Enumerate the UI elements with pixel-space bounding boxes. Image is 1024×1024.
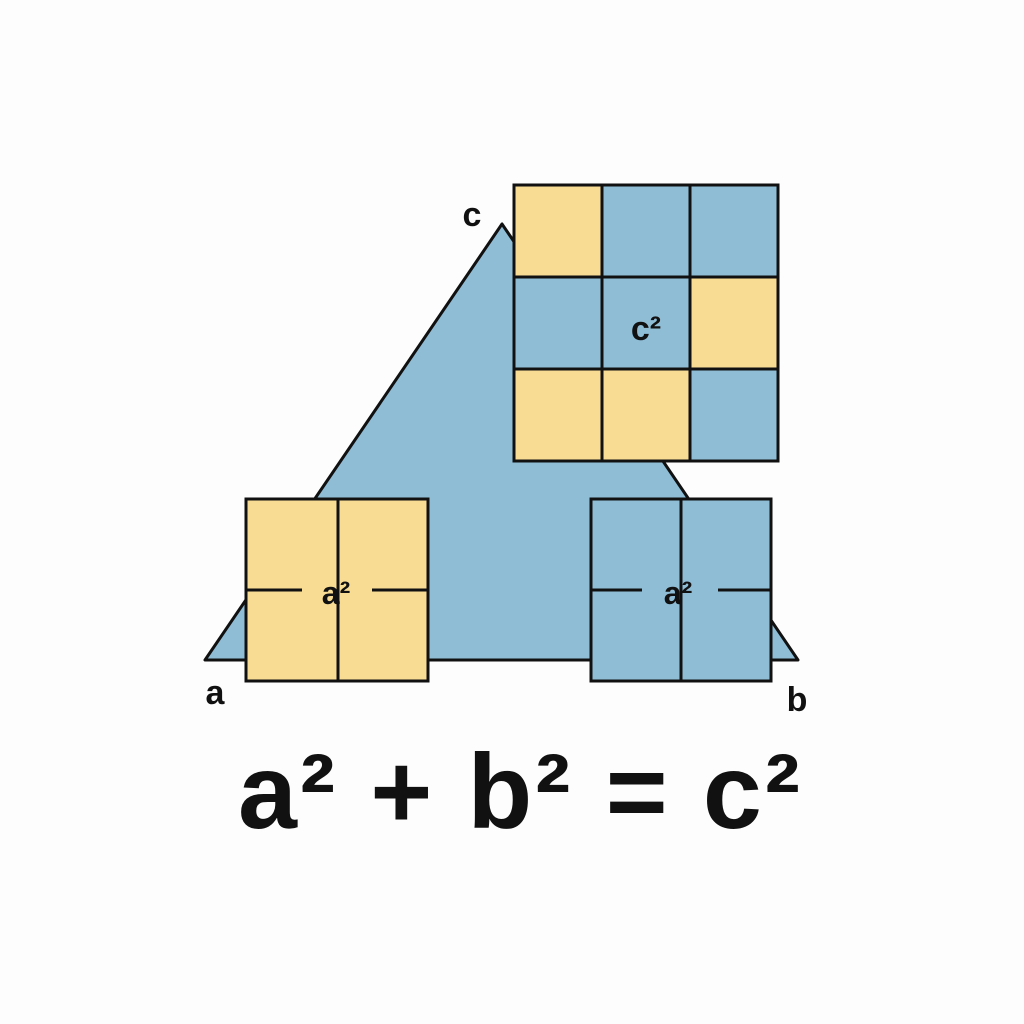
label b: b bbox=[787, 681, 807, 719]
equation: a² + b² = c² bbox=[238, 733, 800, 851]
triangle bbox=[205, 224, 798, 660]
square: c squared grid: c² bbox=[631, 310, 661, 348]
label c: c bbox=[463, 196, 481, 234]
square: a squared (yellow): a² bbox=[322, 575, 350, 611]
label a: a bbox=[206, 674, 226, 712]
square: a squared (yellow) bbox=[246, 499, 428, 681]
square: c squared grid bbox=[514, 185, 778, 461]
square: b squared (blue, labelled a²) bbox=[591, 499, 771, 681]
square: b squared (blue, labelled a²): a² bbox=[664, 575, 692, 611]
